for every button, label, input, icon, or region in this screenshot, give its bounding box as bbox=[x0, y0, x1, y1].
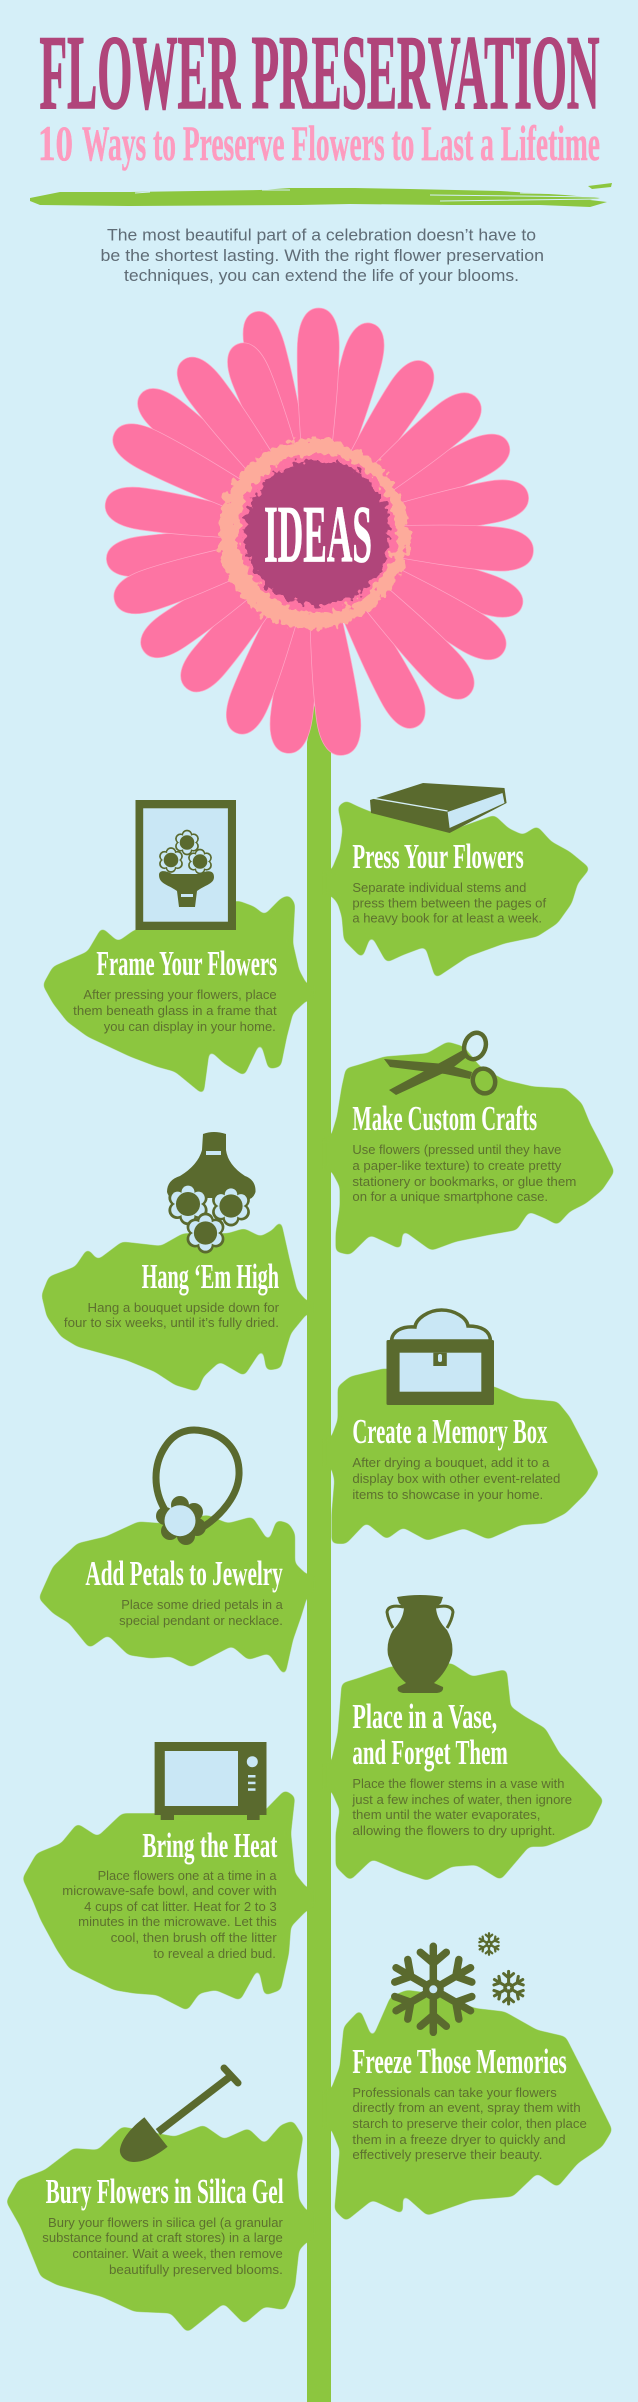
body text: special pendant or necklace. bbox=[119, 1614, 283, 1628]
body text: Separate individual stems and bbox=[352, 881, 526, 895]
flower head: IDEAS bbox=[264, 488, 372, 580]
body text bbox=[352, 1456, 560, 1502]
intro text: be the shortest lasting. With the right flower preservation bbox=[100, 247, 544, 265]
body text: you can display in your home. bbox=[104, 1020, 276, 1034]
body text: effectively preserve their beauty. bbox=[352, 2148, 542, 2162]
panel: make custom crafts bbox=[321, 1030, 614, 1255]
body text: Professionals can take your flowers bbox=[352, 2086, 557, 2100]
heading: Place in a Vase, bbox=[352, 1697, 497, 1736]
body text: just a few inches of water, then ignore bbox=[351, 1793, 572, 1807]
leaf shape bbox=[39, 1515, 315, 1677]
leaf shape bbox=[321, 1368, 599, 1544]
heading: and Forget Them bbox=[352, 1733, 508, 1772]
intro text bbox=[100, 226, 544, 285]
body text bbox=[351, 1777, 572, 1838]
body text: on for a unique smartphone case. bbox=[352, 1190, 548, 1204]
icon: scissors bbox=[384, 1030, 499, 1097]
body text: starch to preserve their color, then place bbox=[352, 2117, 587, 2131]
body text: to reveal a dried bud. bbox=[153, 1947, 276, 1961]
panel: bury flowers in silica gel bbox=[6, 2068, 315, 2333]
body text: Use flowers (pressed until they have bbox=[352, 1143, 561, 1157]
body text: After drying a bouquet, add it to a bbox=[352, 1456, 549, 1470]
body text: Hang a bouquet upside down for bbox=[88, 1301, 279, 1315]
heading: Frame Your Flowers bbox=[96, 944, 277, 983]
intro text: The most beautiful part of a celebration doesn’t have to bbox=[107, 226, 536, 244]
flower head bbox=[102, 307, 535, 758]
heading bbox=[352, 1697, 508, 1772]
panel: add petals to jewelry bbox=[39, 1430, 315, 1677]
body text: Bury your flowers in silica gel (a granular bbox=[48, 2216, 283, 2230]
subtitle: 10 bbox=[38, 115, 73, 171]
panel: frame your flowers bbox=[43, 800, 315, 1095]
leaf shape bbox=[321, 1990, 612, 2221]
heading: Add Petals to Jewelry bbox=[85, 1554, 283, 1593]
body text bbox=[352, 2086, 587, 2162]
body text: container. Wait a week, then remove bbox=[72, 2247, 283, 2261]
flower stem bbox=[307, 692, 331, 2402]
icon: book bbox=[370, 783, 507, 833]
body text bbox=[352, 881, 547, 926]
panel: place in a vase bbox=[321, 1595, 603, 1881]
body text: substance found at craft stores) in a large bbox=[42, 2231, 283, 2245]
body text bbox=[62, 1869, 277, 1961]
body text bbox=[119, 1598, 283, 1628]
body text: 4 cups of cat litter. Heat for 2 to 3 bbox=[84, 1900, 277, 1914]
purple centre bbox=[244, 460, 390, 606]
panel: hang em high bbox=[42, 1132, 315, 1392]
leaf shape bbox=[42, 1220, 315, 1392]
body text bbox=[64, 1301, 279, 1330]
body text: four to six weeks, until it’s fully dried. bbox=[64, 1316, 279, 1330]
leaf shape bbox=[321, 1663, 603, 1881]
body text: them until the water evaporates, bbox=[352, 1808, 540, 1822]
icon: framed bouquet bbox=[136, 800, 236, 930]
body text: display box with other event-related bbox=[352, 1472, 560, 1486]
body text: Place flowers one at a time in a bbox=[98, 1869, 277, 1883]
body text: beautifully preserved blooms. bbox=[109, 2263, 283, 2277]
body text: allowing the flowers to dry upright. bbox=[352, 1824, 555, 1838]
body text: a paper-like texture) to create pretty bbox=[352, 1159, 562, 1173]
body text bbox=[73, 988, 277, 1034]
brush stroke divider bbox=[30, 183, 612, 207]
leaf shape bbox=[321, 801, 590, 978]
panel: create a memory box bbox=[321, 1310, 599, 1544]
panel: freeze those memories bbox=[321, 1933, 612, 2221]
intro text: techniques, you can extend the life of your blooms. bbox=[124, 267, 519, 285]
body text: After pressing your flowers, place bbox=[83, 988, 277, 1002]
leaf shape bbox=[43, 895, 315, 1095]
icon: vase bbox=[387, 1595, 453, 1693]
body text: items to showcase in your home. bbox=[352, 1488, 543, 1502]
body text bbox=[352, 1143, 576, 1204]
leaf shape bbox=[321, 1042, 614, 1255]
icon: memory box bbox=[386, 1310, 494, 1405]
body text: Place the flower stems in a vase with bbox=[352, 1777, 564, 1791]
heading: Press Your Flowers bbox=[352, 837, 524, 876]
icon: microwave bbox=[155, 1742, 266, 1820]
body text: Place some dried petals in a bbox=[121, 1598, 283, 1612]
body text: them beneath glass in a frame that bbox=[73, 1004, 277, 1018]
body text: directly from an event, spray them with bbox=[352, 2101, 581, 2115]
heading: Hang ‘Em High bbox=[142, 1257, 279, 1296]
icon: necklace bbox=[156, 1430, 239, 1545]
icon: hanging bouquet bbox=[167, 1132, 256, 1254]
petals bbox=[102, 307, 535, 758]
icon: shovel bbox=[120, 2068, 238, 2162]
panel: press your flowers bbox=[321, 783, 590, 978]
orange ring bbox=[218, 439, 408, 629]
icon: snowflakes bbox=[390, 1933, 525, 2032]
body text: microwave-safe bowl, and cover with bbox=[62, 1884, 277, 1898]
body text: stationery or bookmarks, or glue them bbox=[352, 1175, 576, 1189]
heading: Bury Flowers in Silica Gel bbox=[46, 2172, 284, 2211]
body text bbox=[42, 2216, 283, 2277]
body text: a heavy book for at least a week. bbox=[352, 912, 542, 926]
body text: minutes in the microwave. Let this bbox=[78, 1915, 277, 1929]
body text: them in a freeze dryer to quickly and bbox=[352, 2133, 566, 2147]
heading: Bring the Heat bbox=[142, 1826, 278, 1865]
leaf shape bbox=[6, 2121, 315, 2333]
body text: press them between the pages of bbox=[352, 897, 547, 911]
body text: cool, then brush off the litter bbox=[111, 1931, 277, 1945]
leaf shape bbox=[22, 1790, 315, 2011]
panel: bring the heat bbox=[22, 1742, 315, 2011]
